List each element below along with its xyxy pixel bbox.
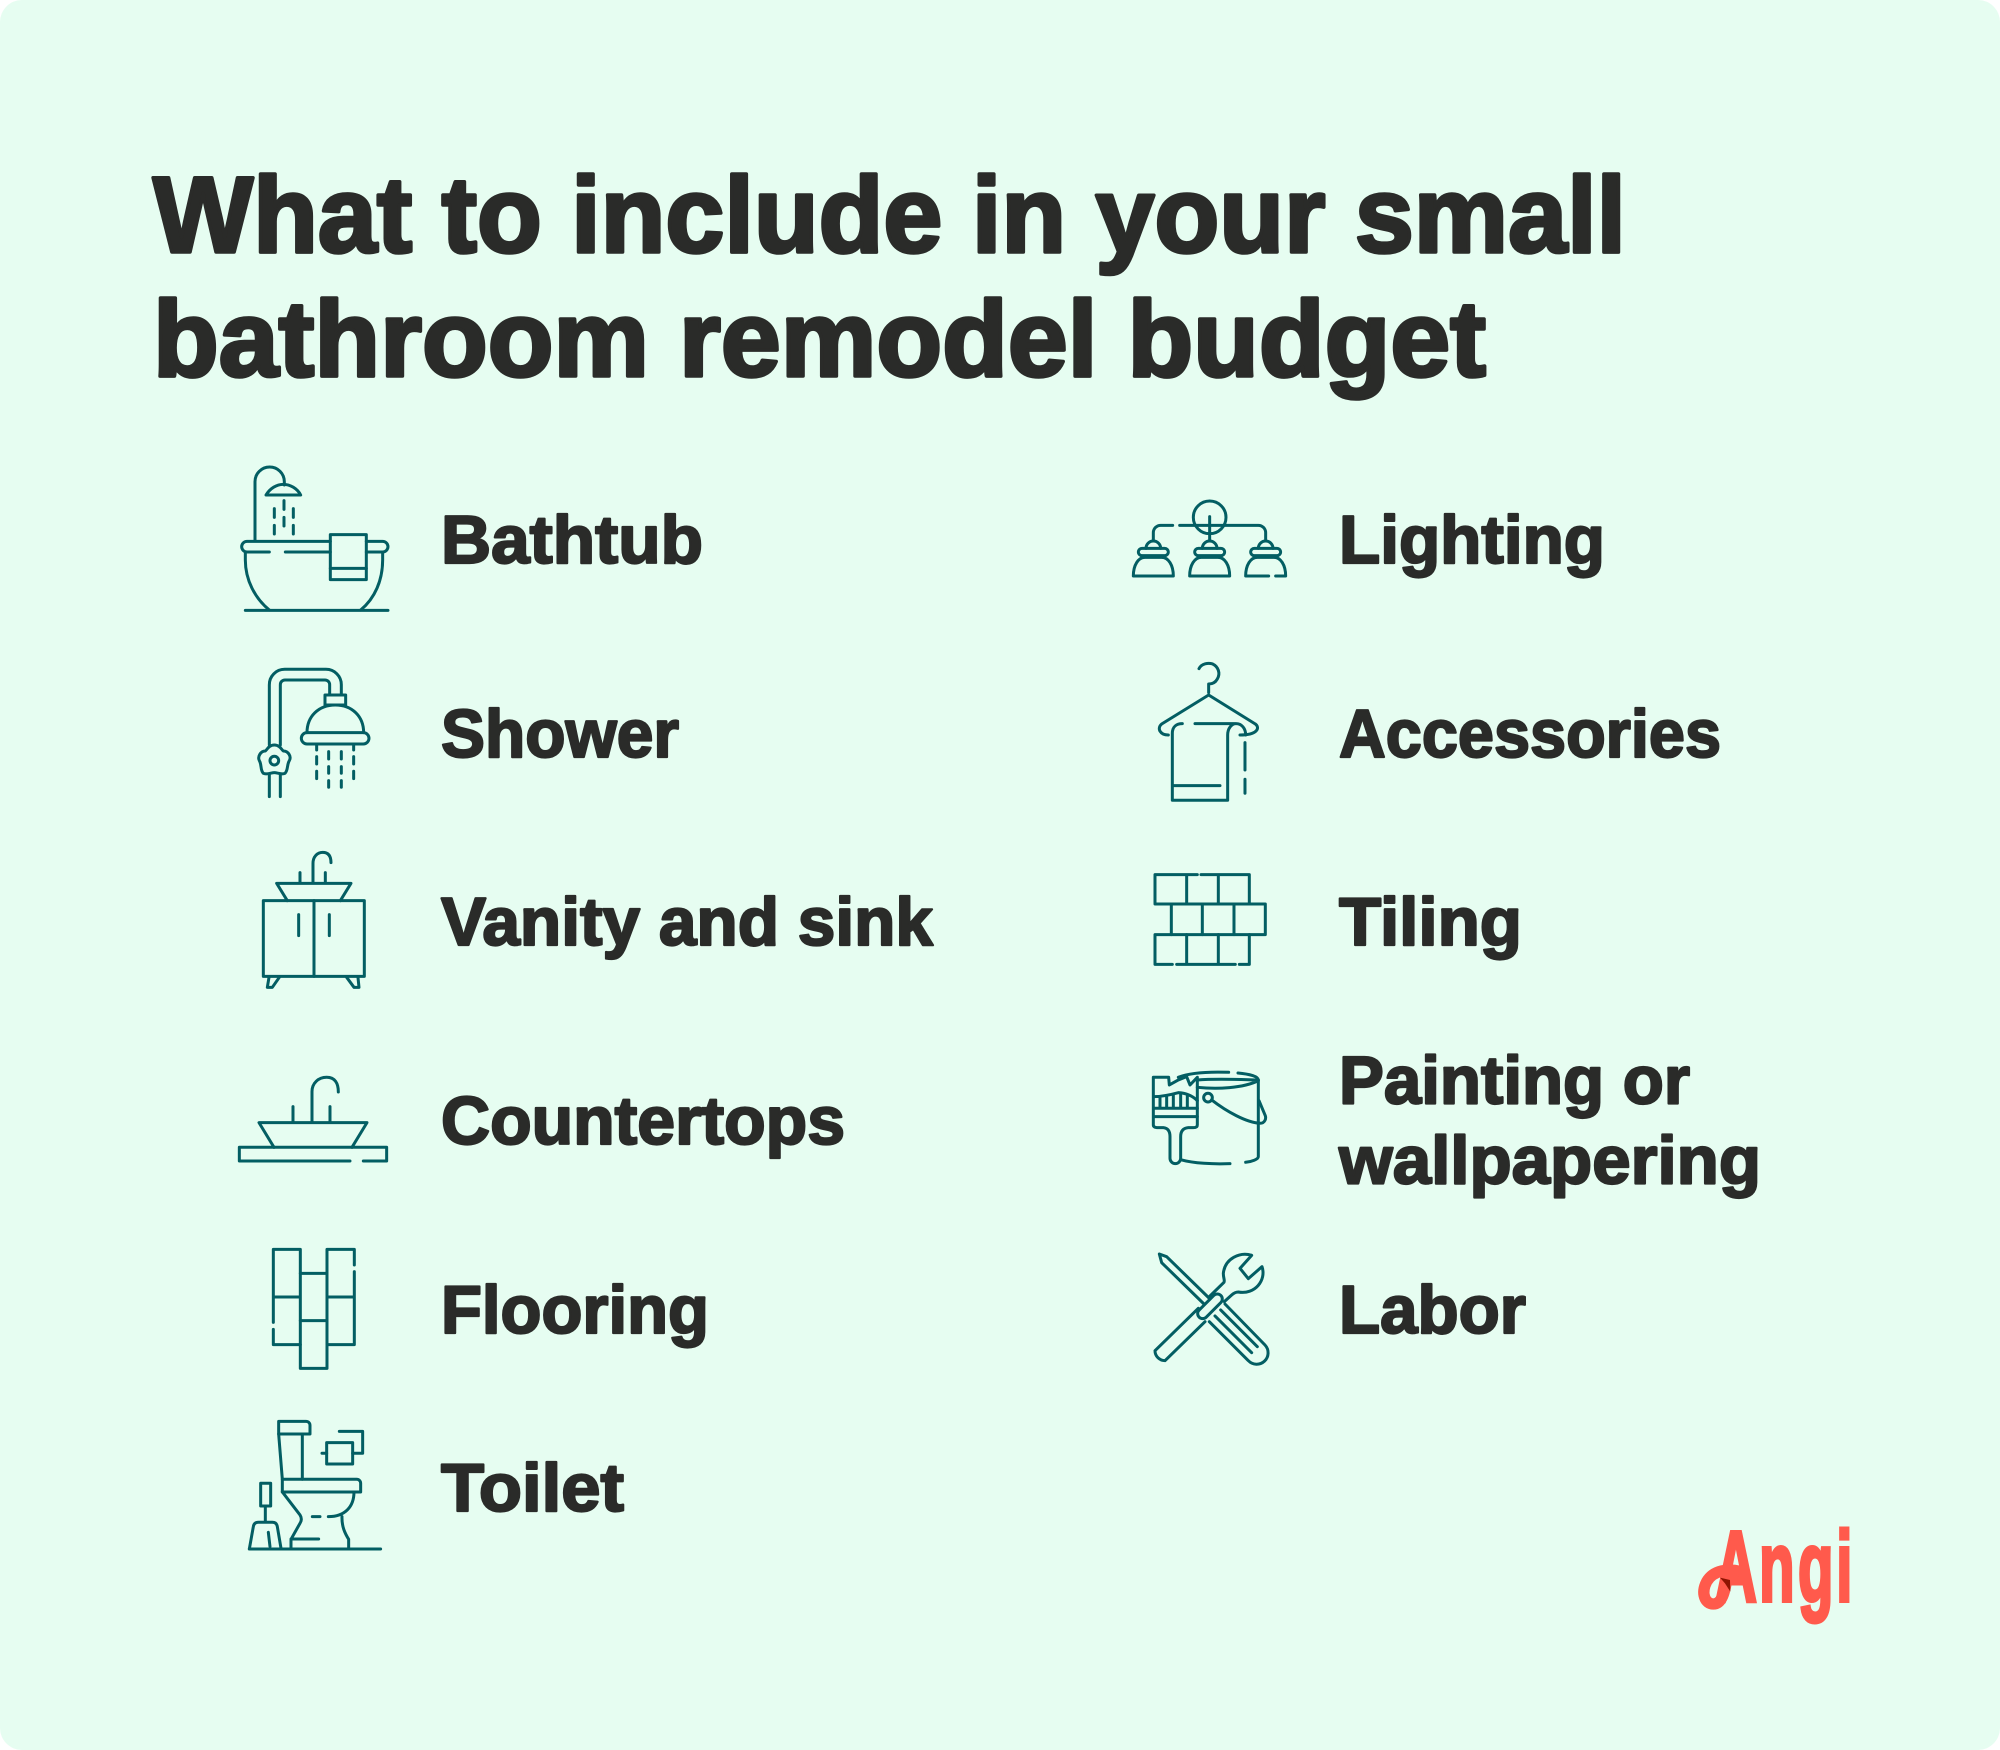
title: bathroom remodel budget: [153, 278, 1486, 399]
label: Tiling: Tiling: [1339, 884, 1522, 960]
title: [153, 154, 1626, 399]
icon: bathtub: [242, 467, 388, 610]
label: Lighting: Lighting: [1339, 502, 1605, 578]
item: Countertops: [239, 1077, 845, 1161]
icon: toilet: [249, 1421, 381, 1549]
item: Bathtub: [242, 467, 703, 610]
label: Shower: Shower: [441, 696, 679, 772]
label: Accessories: Accessories: [1339, 696, 1721, 772]
icon: hanger with towel: [1159, 663, 1258, 800]
label: Painting or wallpapering: [1338, 1042, 1761, 1198]
icon: crossed tools: [1155, 1254, 1268, 1364]
label: Vanity and sink: Vanity and sink: [441, 884, 933, 960]
label: Flooring: Flooring: [441, 1272, 709, 1348]
title: What to include in your small: [153, 154, 1626, 275]
label: Toilet: Toilet: [441, 1450, 624, 1526]
label: Labor: Labor: [1339, 1272, 1526, 1348]
item: Shower: [259, 669, 679, 797]
icon: tiles: [1155, 875, 1265, 964]
item: Accessories: [1159, 663, 1721, 800]
item: Vanity and sink: [263, 852, 933, 987]
item: Labor: [1155, 1254, 1526, 1364]
icon: paint bucket and brush: [1153, 1072, 1266, 1164]
icon: vanity: [263, 852, 364, 987]
item: Flooring: [273, 1249, 709, 1368]
item: Toilet: [249, 1421, 624, 1549]
label: Painting or wallpapering: wallpapering: [1338, 1122, 1761, 1198]
label: Countertops: Countertops: [441, 1083, 845, 1159]
icon: countertop: [239, 1077, 387, 1161]
icon: flooring: [273, 1249, 354, 1368]
logo: Angi: Angi: [1715, 1512, 1852, 1623]
label: Painting or wallpapering: Painting or: [1339, 1042, 1690, 1118]
item: Lighting: [1133, 501, 1605, 578]
icon: shower: [259, 669, 369, 797]
label: Bathtub: Bathtub: [441, 502, 703, 578]
item: Painting or wallpapering: [1153, 1042, 1761, 1198]
icon: lighting: [1133, 501, 1286, 576]
item: Tiling: [1155, 875, 1522, 964]
